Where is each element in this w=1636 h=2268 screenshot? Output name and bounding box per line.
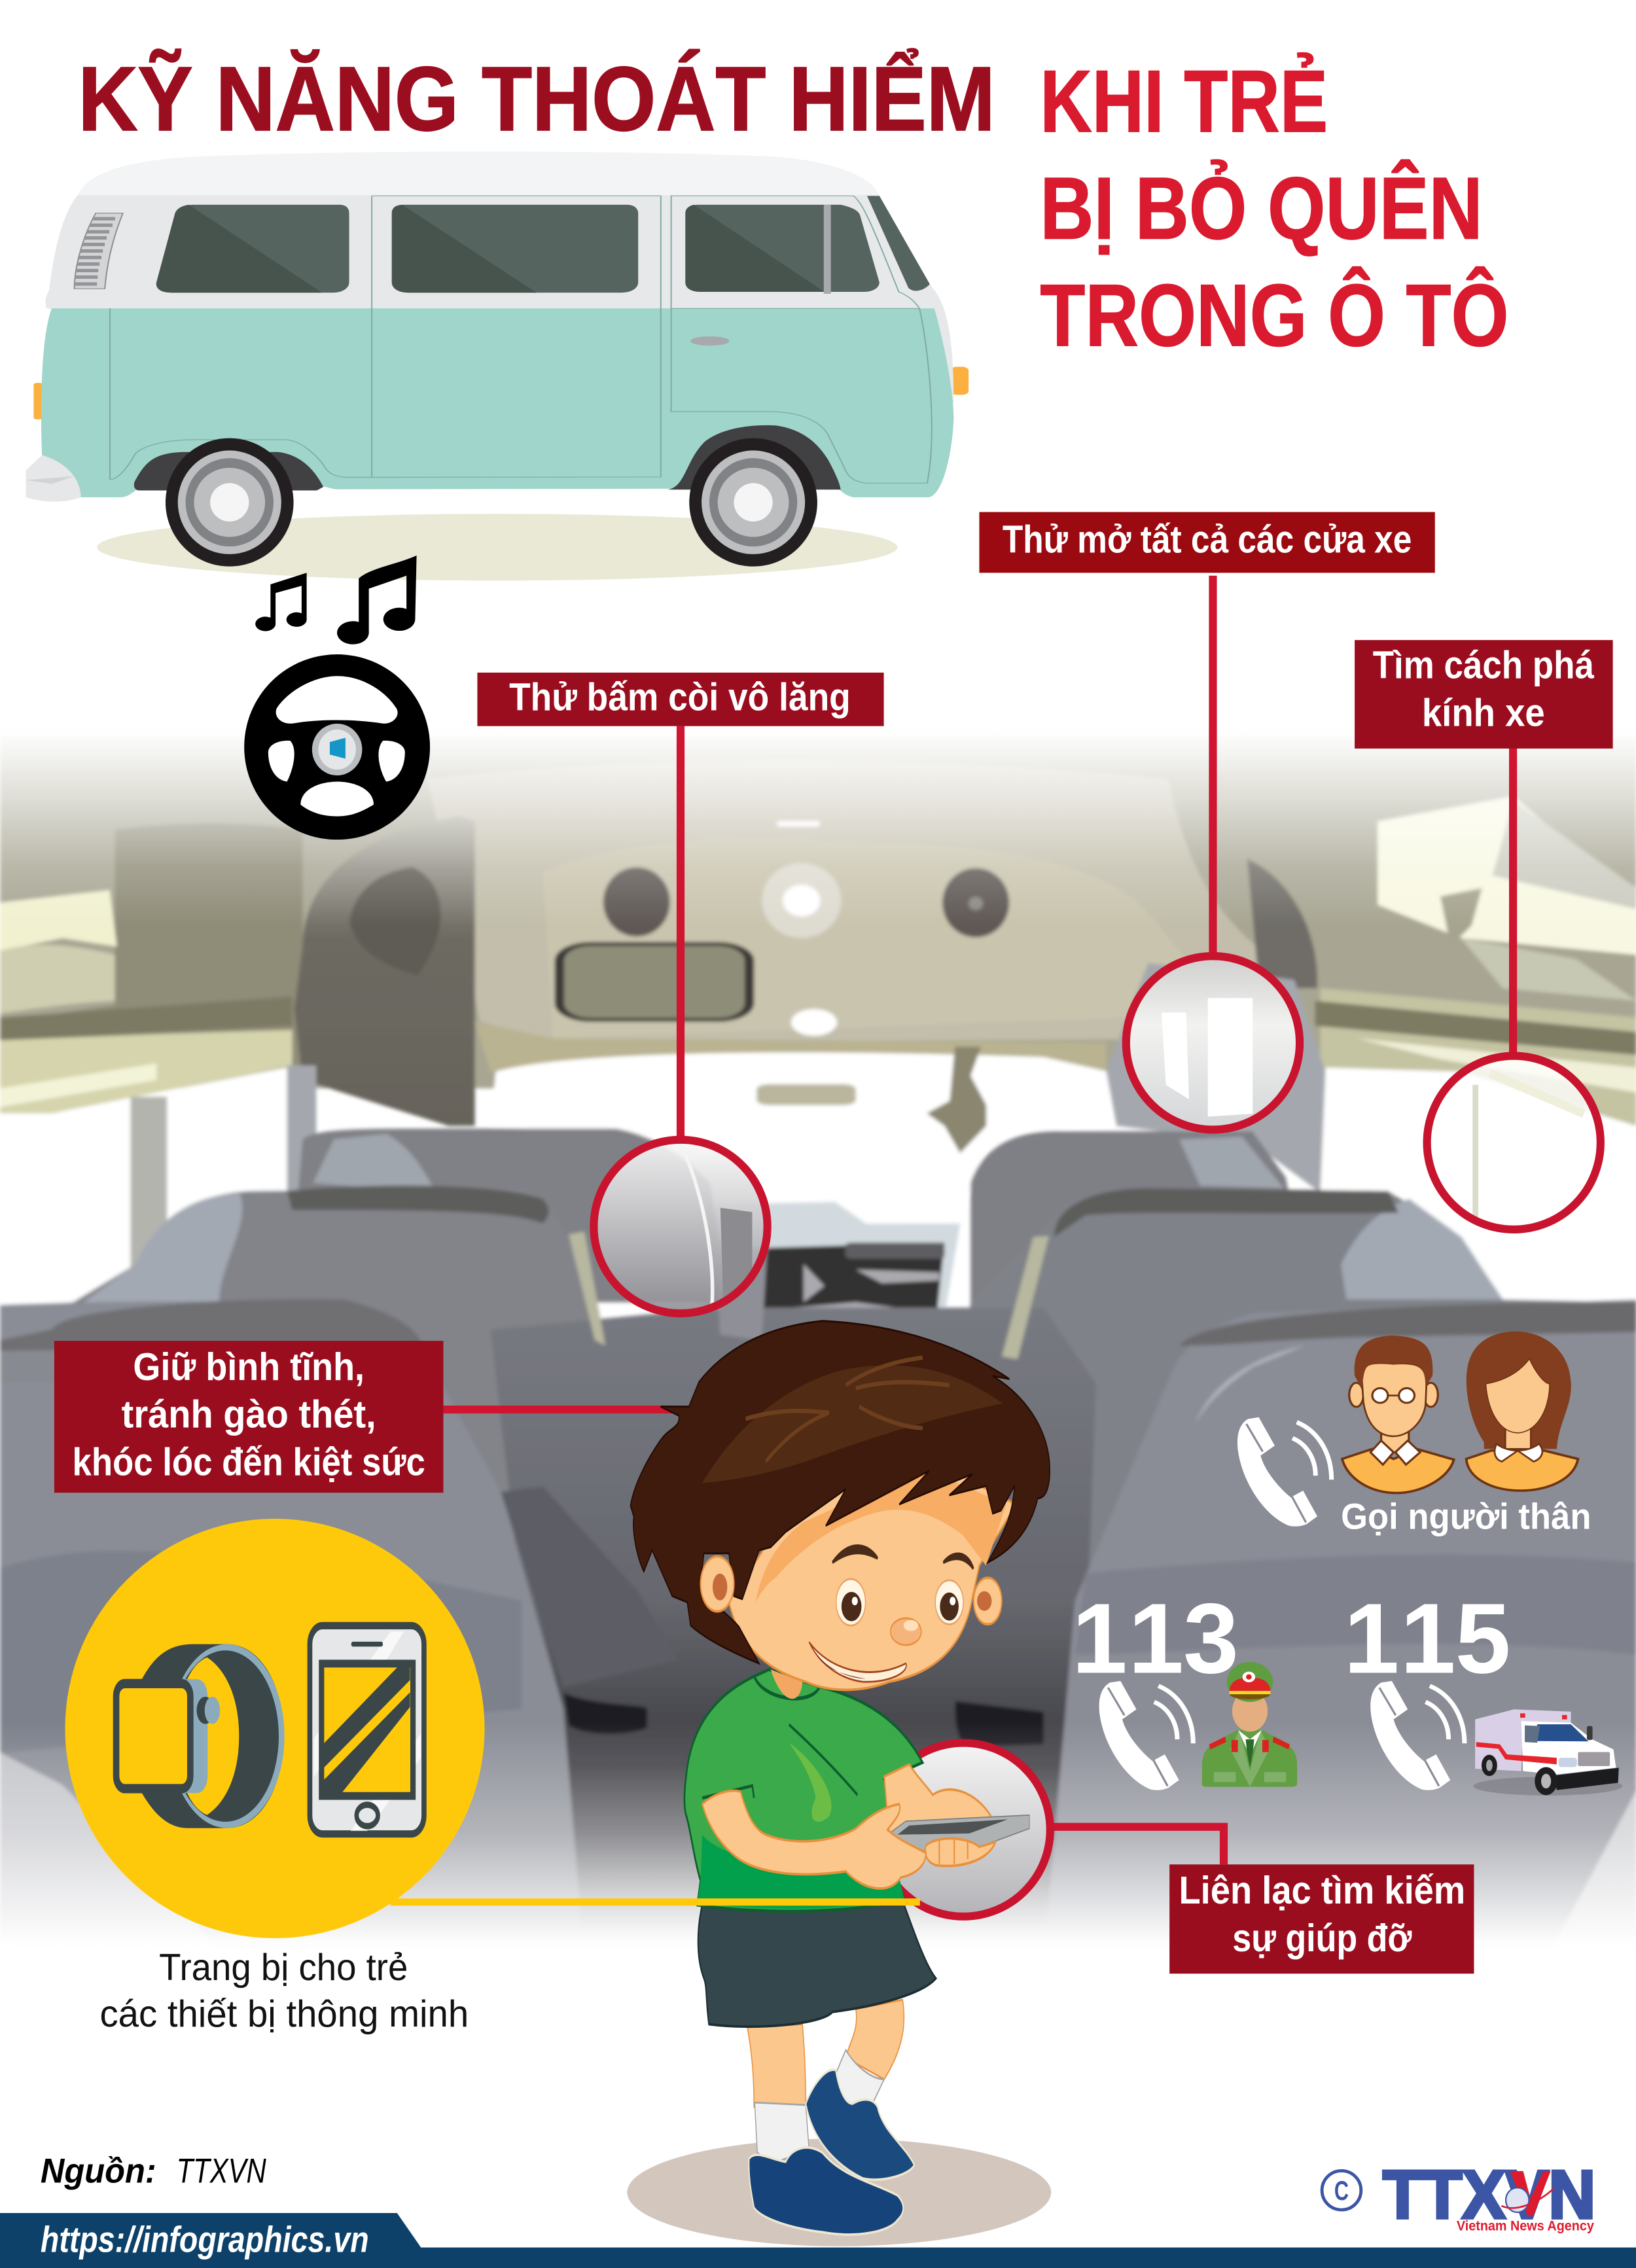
title: subheading xyxy=(1040,52,1508,364)
title: main heading: KỸ NĂNG THOÁT HIỂM xyxy=(78,48,995,150)
boy: hair xyxy=(630,1321,1050,1663)
connector: devices xyxy=(391,1898,920,1905)
source xyxy=(41,2152,266,2191)
car interior background xyxy=(0,730,1636,2003)
icon: handset xyxy=(1237,1417,1332,1527)
callout line: phone xyxy=(1053,1827,1224,1864)
boy: shorts xyxy=(698,1905,936,2027)
label: stay calm: tránh gào thét, xyxy=(122,1392,376,1436)
source: TTXVN xyxy=(177,2152,266,2191)
icon: ambulance xyxy=(1473,1709,1622,1796)
icon: music notes xyxy=(255,556,417,645)
number: 113: 113 xyxy=(1072,1583,1239,1694)
icon: police officer xyxy=(1202,1662,1297,1787)
boy: hair highlights xyxy=(702,1358,1003,1483)
panel: smart devices xyxy=(65,1519,484,1938)
boy: right ear xyxy=(974,1578,1002,1624)
icon: steering wheel xyxy=(244,654,430,840)
logo: TTXVN: TTXVN xyxy=(1383,2157,1595,2233)
label: contact help xyxy=(1169,1864,1474,1974)
logo: copyright xyxy=(1322,2171,1361,2210)
label: contact help: Liên lạc tìm kiếm xyxy=(1179,1868,1465,1912)
label: doors xyxy=(979,512,1435,573)
boy: left ear xyxy=(701,1557,734,1612)
boy: legs xyxy=(747,2000,904,2107)
text: devices caption: các thiết bị thông minh xyxy=(100,1993,469,2035)
group: call family xyxy=(1237,1332,1578,1527)
callout line: calm xyxy=(442,1408,680,1411)
logo: TTXVN: Vietnam News Agency xyxy=(1457,2219,1594,2234)
callout line: doors xyxy=(1211,576,1215,957)
icon: father xyxy=(1342,1336,1454,1493)
callout circle: phone xyxy=(877,1743,1050,1917)
callout line: horn xyxy=(679,726,683,1143)
text: devices caption xyxy=(100,1947,469,2035)
van illustration xyxy=(26,152,969,580)
label: break glass xyxy=(1355,640,1613,749)
label: stay calm: khóc lóc đến kiệt sức xyxy=(73,1440,425,1484)
text: call family: Gọi người thân xyxy=(1341,1496,1591,1536)
label: break glass: Tìm cách phá xyxy=(1373,643,1595,687)
callout circle: door xyxy=(1126,956,1300,1129)
label: doors: Thử mở tất cả các cửa xe xyxy=(1003,517,1412,561)
website url: https://infographics.vn xyxy=(41,2220,369,2260)
boy: head xyxy=(729,1455,1016,1699)
boy: shirt xyxy=(685,1669,923,1911)
label: break glass: kính xe xyxy=(1422,691,1545,735)
title: subheading: KHI TRẺ xyxy=(1040,52,1328,151)
label: stay calm xyxy=(54,1341,443,1493)
callout circle: glass xyxy=(1427,1056,1601,1230)
title: subheading: BỊ BỎ QUÊN xyxy=(1040,159,1483,258)
boy: left arm xyxy=(702,1791,926,1888)
text: devices caption: Trang bị cho trẻ xyxy=(159,1947,408,1989)
boy illustration xyxy=(627,1321,1051,2246)
label: contact help: sự giúp đỡ xyxy=(1232,1916,1412,1960)
icon: handset 113 xyxy=(1099,1681,1193,1790)
logo: copyright: C xyxy=(1334,2175,1349,2206)
icon: smart watch xyxy=(116,1644,285,1828)
label: stay calm: Giữ bình tĩnh, xyxy=(133,1345,365,1389)
boy: phone xyxy=(887,1815,1029,1853)
callout circle: horn xyxy=(594,1140,768,1313)
icon: mother xyxy=(1467,1332,1578,1491)
footer bar xyxy=(0,2213,1636,2268)
label: horn: Thử bấm còi vô lăng xyxy=(509,675,851,718)
group: emergency icons xyxy=(1099,1662,1622,1796)
boy: right arm xyxy=(884,1764,996,1866)
icon: handset 115 xyxy=(1370,1681,1465,1790)
source: Nguồn: xyxy=(41,2152,156,2191)
icon: smartphone xyxy=(310,1625,424,1834)
title: subheading: TRONG Ô TÔ xyxy=(1040,266,1508,364)
callout line: glass xyxy=(1511,748,1515,1056)
number: 115: 115 xyxy=(1343,1583,1511,1694)
boy: fingers xyxy=(925,1839,995,1866)
